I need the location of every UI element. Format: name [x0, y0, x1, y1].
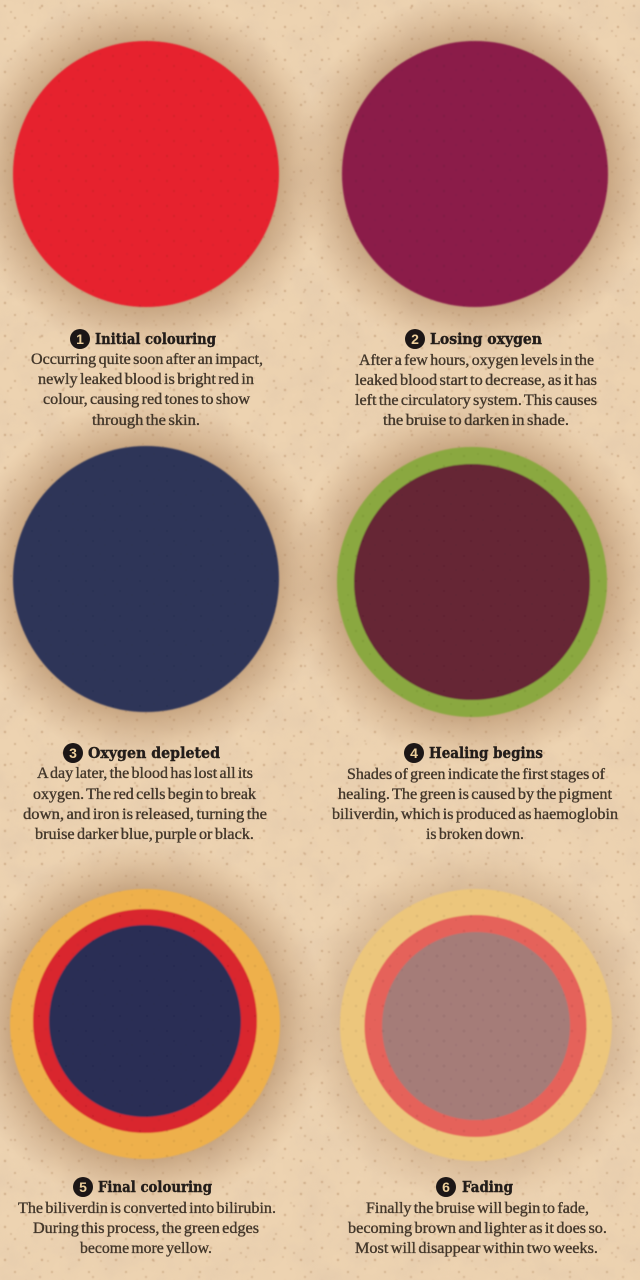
body text 3	[23, 765, 267, 843]
body text 4	[332, 766, 618, 843]
body text 6: Finally the bruise will begin to fade,	[366, 1200, 589, 1217]
body text 1: colour, causing red tones to show	[43, 391, 251, 408]
caption 6: Fading	[348, 1177, 607, 1257]
body text 5	[18, 1200, 276, 1257]
body text 3: bruise darker blue, purple or black.	[35, 826, 254, 843]
body text 6	[348, 1200, 607, 1257]
caption 5: Final colouring	[18, 1177, 276, 1257]
body text 2: the bruise to darken in shade.	[383, 412, 569, 429]
circle 5: final colouring, yellow, red and navy rings	[10, 889, 280, 1159]
heading 2: Losing oxygen	[430, 330, 542, 348]
number badge 6: 6	[442, 1179, 450, 1195]
circle 6: fading, pale yellow, coral and mauve rings	[340, 889, 612, 1161]
body text 4: biliverdin, which is produced as haemoglobin	[332, 806, 618, 823]
number badge 5: 5	[79, 1179, 87, 1195]
body text 4: healing. The green is caused by the pigment	[338, 786, 613, 803]
caption 4: Healing begins	[332, 743, 618, 843]
body text 1: through the skin.	[92, 412, 200, 429]
body text 4: is broken down.	[426, 826, 524, 843]
body text 3: oxygen. The red cells begin to break	[33, 786, 256, 803]
number badge 1: 1	[76, 331, 84, 347]
circle 2: losing oxygen, dark magenta	[342, 41, 608, 307]
body text 2	[355, 352, 597, 429]
body text 2: leaked blood start to decrease, as it has	[355, 372, 597, 389]
circle 4: healing begins, green ring with maroon centre	[337, 447, 607, 717]
heading 6: Fading	[462, 1178, 513, 1196]
number badge 3	[63, 743, 83, 763]
number badge 6	[436, 1177, 456, 1197]
body text 6: becoming brown and lighter as it does so.	[348, 1220, 607, 1237]
heading 4: Healing begins	[429, 744, 543, 762]
body text 2: left the circulatory system. This causes	[355, 392, 597, 409]
body text 6: Most will disappear within two weeks.	[355, 1240, 598, 1257]
number badge 1	[70, 329, 90, 349]
body text 4: Shades of green indicate the first stages of	[347, 766, 606, 783]
body text 2: After a few hours, oxygen levels in the	[359, 352, 594, 369]
number badge 4	[404, 743, 424, 763]
body text 1	[31, 351, 263, 429]
caption 2: Losing oxygen	[355, 329, 597, 429]
caption 3: Oxygen depleted	[23, 743, 267, 843]
body text 1: Occurring quite soon after an impact,	[31, 351, 263, 368]
number badge 2	[405, 329, 425, 349]
number badge 4: 4	[410, 745, 418, 761]
body text 1: newly leaked blood is bright red in	[38, 371, 254, 388]
body text 3: A day later, the blood has lost all its	[37, 765, 253, 782]
number badge 5	[73, 1177, 93, 1197]
circle 1: initial colouring, bright red	[13, 41, 279, 307]
circle 3: oxygen depleted, navy	[13, 446, 279, 712]
number badge 3: 3	[69, 745, 77, 761]
body text 3: down, and iron is released, turning the	[23, 806, 267, 823]
body text 5: become more yellow.	[80, 1240, 212, 1257]
heading 3: Oxygen depleted	[88, 744, 220, 762]
caption 1: Initial colouring	[31, 329, 263, 429]
heading 1: Initial colouring	[95, 330, 216, 348]
body text 5: During this process, the green edges	[33, 1220, 259, 1237]
body text 5: The biliverdin is converted into bilirubin.	[18, 1200, 276, 1217]
heading 5: Final colouring	[98, 1178, 212, 1196]
number badge 2: 2	[411, 331, 419, 347]
